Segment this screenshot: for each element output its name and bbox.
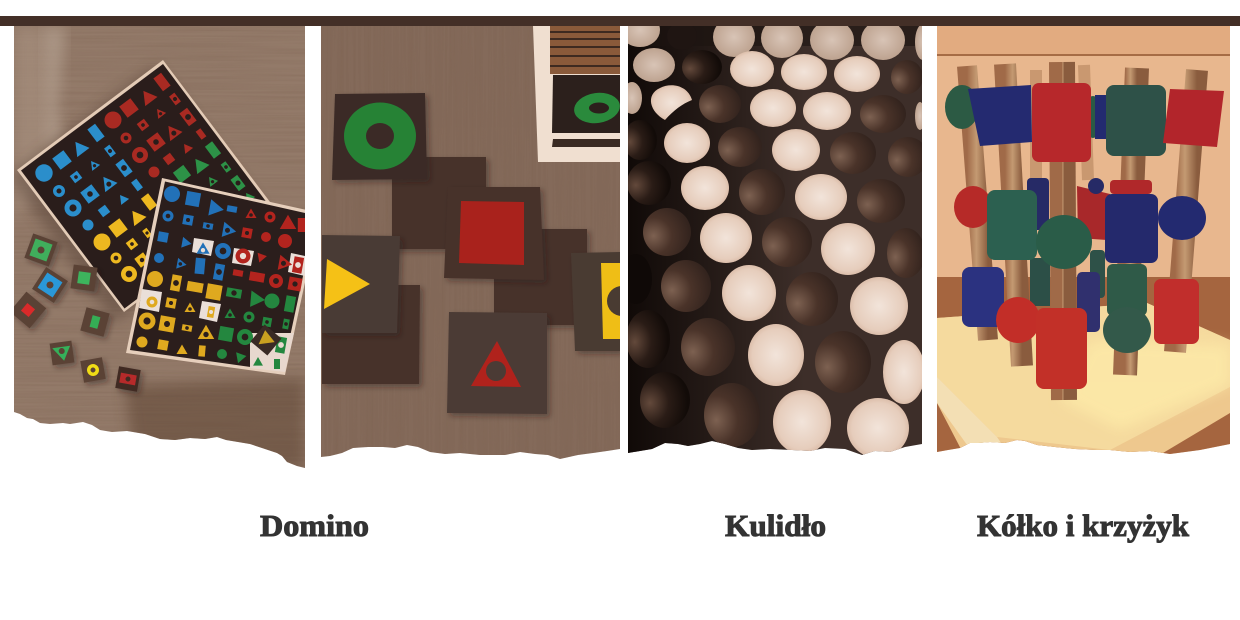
green cylinder, middle	[987, 190, 1037, 260]
top dark bar	[0, 16, 1240, 26]
loose domino tiles on the table	[10, 233, 141, 392]
tile: red triangle with hole	[447, 312, 547, 414]
panel: Kółko i krzyżyk wooden 3D game	[937, 26, 1230, 457]
glass tubes with wooden sticks	[967, 62, 1197, 400]
tile: green ring	[332, 93, 427, 180]
wooden base board	[937, 303, 1230, 456]
red cube, top right	[1163, 89, 1224, 147]
blue cylinder, lower left	[962, 267, 1004, 327]
caption: Kulidło: Kulidło	[725, 508, 826, 543]
red cylinder, lower right	[1154, 279, 1199, 344]
red ball, middle left	[954, 186, 988, 228]
red cylinder, front centre	[1036, 308, 1087, 389]
green cylinder, top	[1106, 85, 1166, 156]
big game board	[9, 60, 270, 322]
tile: yellow triangle	[322, 235, 400, 333]
panel: domino photo with game boards on a wooden table	[9, 26, 320, 471]
caption: Domino: Domino	[260, 508, 369, 543]
domino box with tiles	[533, 26, 622, 162]
green ball, lower right	[1103, 314, 1151, 353]
red cylinder, top centre	[1032, 83, 1091, 162]
back row pieces	[1027, 95, 1152, 332]
blue cylinder, middle right	[1105, 194, 1158, 263]
panel: Kulidło board with black and white balls	[620, 13, 931, 458]
caption: Kółko i krzyżyk: Kółko i krzyżyk	[977, 508, 1190, 543]
stacked plain tile backs	[322, 157, 587, 384]
white balls	[620, 13, 931, 458]
tile: red square	[444, 187, 544, 280]
blue cube, top	[968, 85, 1032, 146]
green ball, centre	[1036, 215, 1092, 269]
dark balls	[628, 50, 922, 447]
small game board with placed tiles	[126, 178, 320, 375]
loose tile on the board with yellow triangle	[251, 325, 281, 355]
tile: yellow square with hole	[571, 252, 620, 357]
blue ball, middle right	[1158, 196, 1206, 240]
panel: large domino tiles on a wooden floor	[321, 26, 637, 461]
green ball, top left	[945, 85, 975, 129]
red ball, lower	[996, 297, 1040, 343]
